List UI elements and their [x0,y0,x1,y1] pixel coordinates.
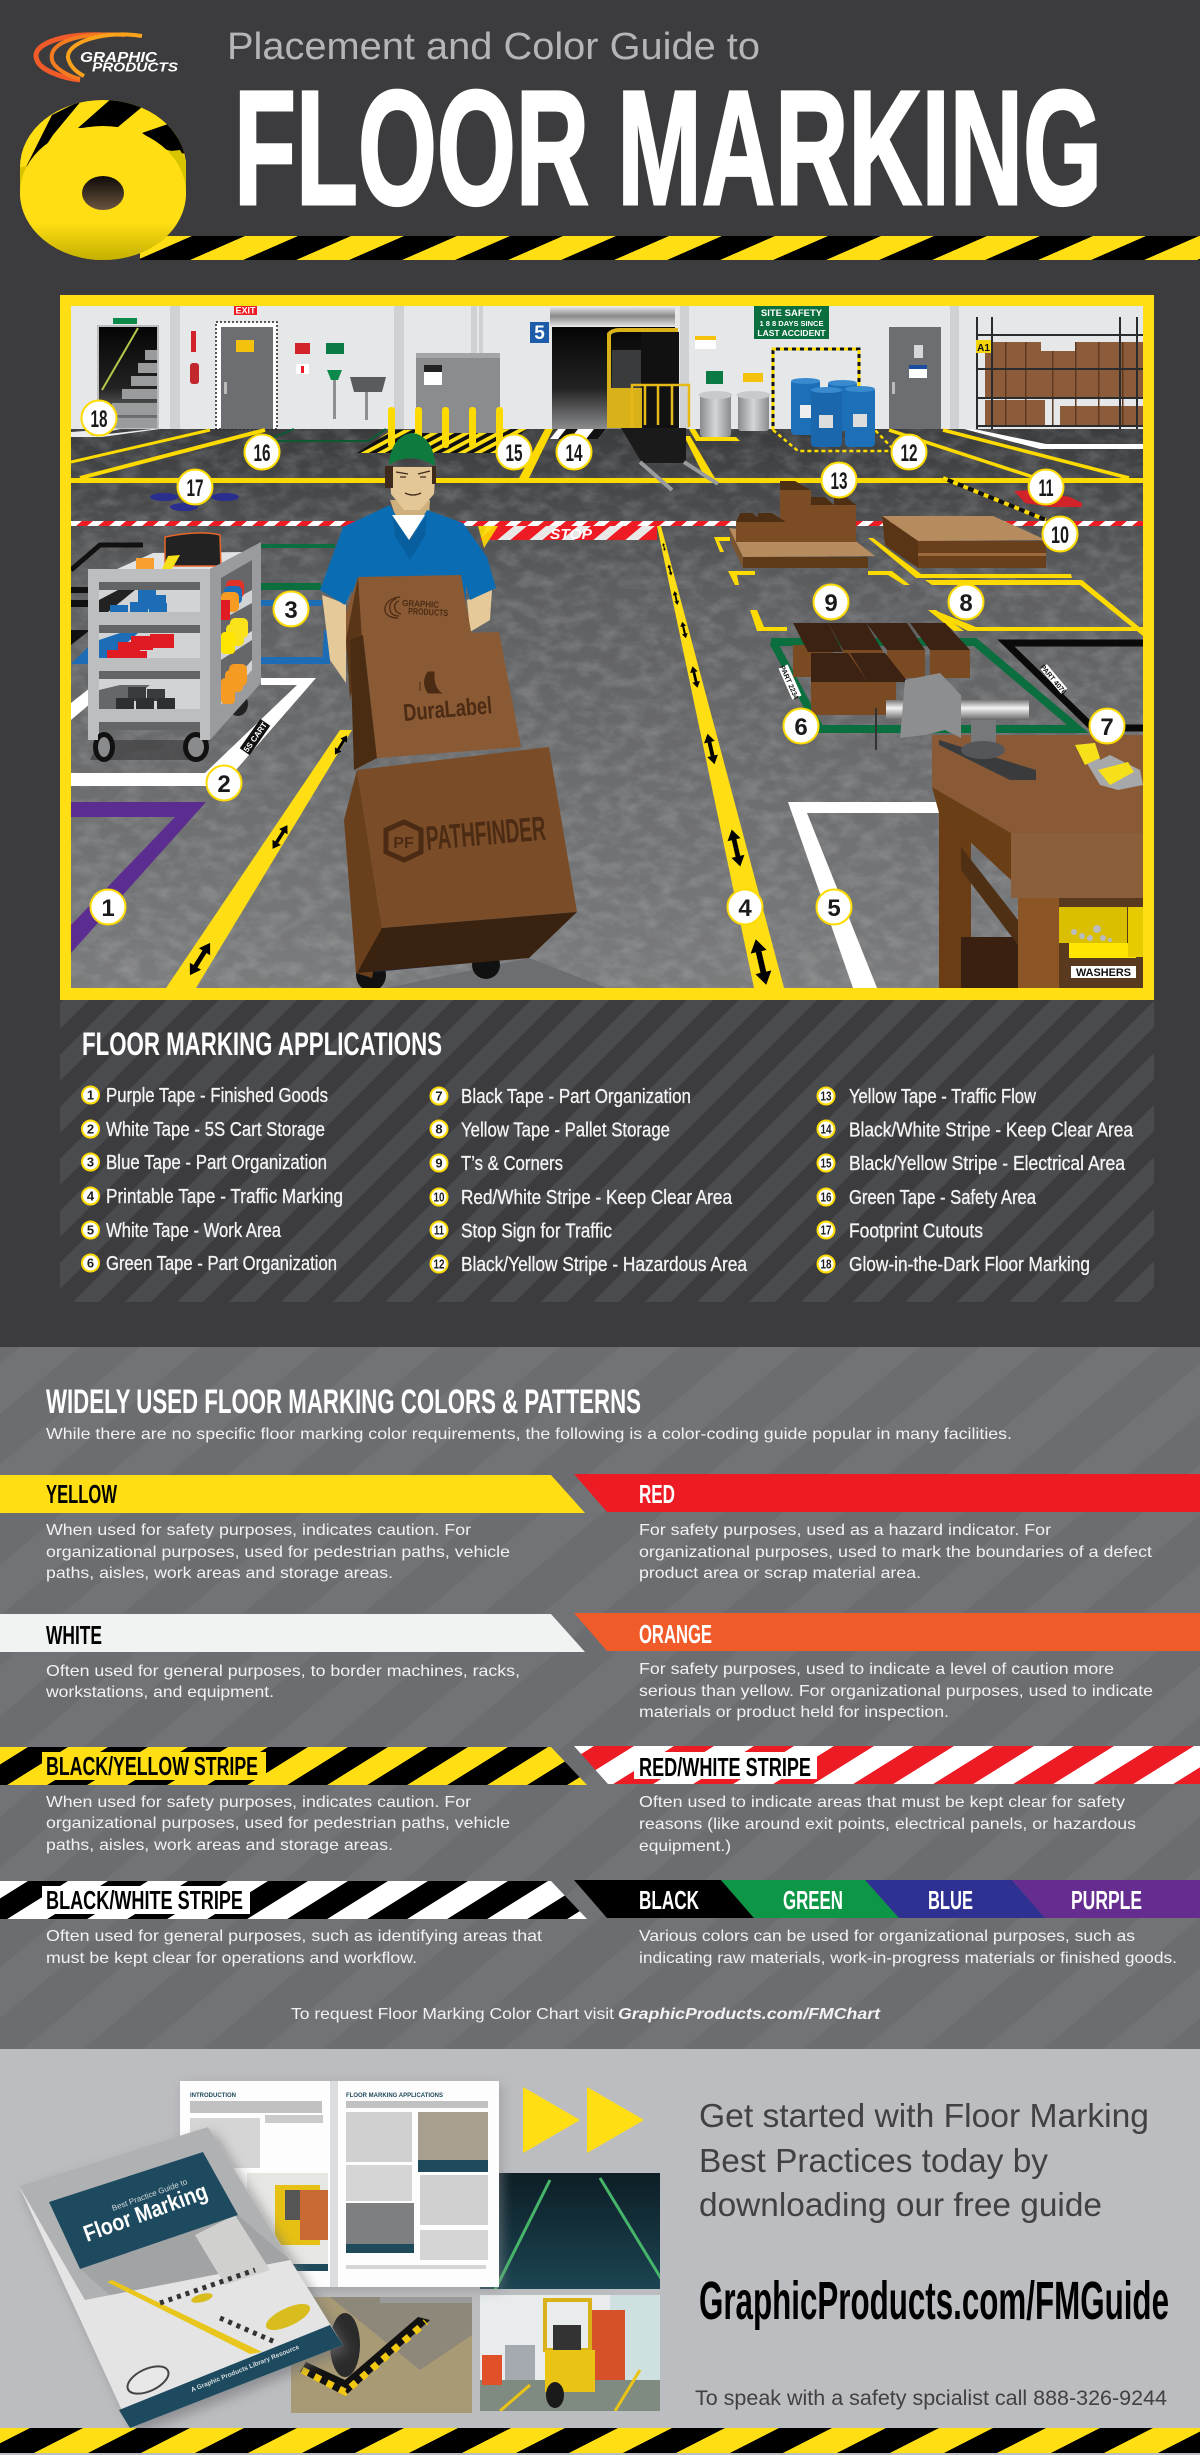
wall pillars and pipes [170,306,959,429]
red/white keep clear stripe [71,521,1143,526]
number badge 3: 3 [284,597,298,624]
color block: black/white stripe [0,1881,587,1967]
color block: black, green, blue, purple: BLUE [928,1885,973,1915]
number badge 2: 2 [217,771,231,798]
application list column 2: 9 [435,1156,443,1170]
color block: yellow [0,1475,585,1582]
color block: red/white stripe: reasons (like around exit points, electrical panels, or hazardous [639,1816,1136,1833]
electrical panel with bollards and hazard floor area [357,353,527,453]
number badge 13: 13 [830,468,848,495]
application list column 2: Black Tape - Part Organization [461,1086,691,1108]
number badge 11 [1028,470,1064,504]
color block: black/white stripe: must be kept clear for operations and workflow. [46,1950,417,1967]
wall [71,306,1143,430]
photo: glow-in-the-dark floor [480,2173,665,2290]
white tape 5S cart area [71,678,316,786]
call to action text [699,2097,1149,2223]
number badge 4 [728,890,762,924]
color block: black/yellow stripe: When used for safety purposes, indicates caution. For [46,1794,472,1811]
worker [320,433,496,683]
bench vise [875,673,1036,780]
color block: red/white stripe: RED/WHITE STRIPE [639,1752,811,1782]
dock door and location sign: 5 [534,323,545,344]
color block: black/white stripe: Often used for general purposes, such as identifying areas that [46,1928,543,1945]
application list column 3: Yellow Tape - Traffic Flow [849,1086,1036,1108]
forklift [609,330,718,490]
header: logo [36,34,178,80]
color block: red: organizational purposes, used to mark the boundaries of a defect [639,1544,1153,1561]
arrows: double chevron [523,2087,644,2153]
pallets with T's and corners [714,481,1143,636]
open guide booklet [180,2081,502,2290]
application list column 2: 10 [434,1190,444,1204]
number badge 1: 1 [101,895,115,922]
guide cover: Floor Marking [80,2178,211,2247]
purple tape [71,802,206,953]
application list column 1: 4 [87,1188,95,1204]
application list column 1: 5 [87,1222,94,1238]
applications heading: FLOOR MARKING APPLICATIONS [82,1026,442,1062]
site safety sign: SITE SAFETY [761,308,823,319]
number badge 6 [784,708,818,744]
application list column 3: 14 [820,1122,832,1136]
number badge 8 [948,584,984,620]
guide cover: Best Practice Guide to [111,2177,189,2213]
worker hat [389,433,435,466]
white tape 5S cart area: 5S CART [242,721,269,754]
color block: yellow: When used for safety purposes, indicates caution. For [46,1522,472,1539]
application list column 3: 17 [820,1222,832,1238]
application list column 1: White Tape - Work Area [106,1220,282,1242]
storage shelving with boxes: A1 [977,343,990,354]
worker arms [322,590,492,683]
PathFinder box: PF [393,835,414,852]
color block: black/yellow stripe: paths, aisles, work areas and storage areas. [46,1837,393,1854]
stop band: STOP [550,526,593,543]
black tape part area: PART 4076 [1039,664,1067,696]
number badge 5 [816,890,852,924]
scene frame [60,295,1154,1000]
color block: black/white stripe: BLACK/WHITE STRIPE [46,1885,243,1915]
application list column 3: Glow-in-the-Dark Floor Marking [849,1254,1090,1276]
application list column 2: 11 [434,1222,444,1238]
call to action text: Get started with Floor Marking [699,2097,1149,2134]
application list column 2: 8 [435,1122,443,1136]
header: subtitle: Placement and Color Guide to [227,26,760,68]
color block: white [0,1614,585,1701]
footprints and stop sign decal [150,490,1082,511]
open guide booklet: INTRODUCTION [190,2093,236,2099]
color block: white: workstations, and equipment. [45,1684,274,1701]
application list column 2: Stop Sign for Traffic [461,1220,612,1242]
cart front frame [88,569,210,740]
cart front rolls [107,590,175,709]
application list column 2: 12 [434,1256,444,1272]
application list column 2: Yellow Tape - Pallet Storage [461,1120,670,1142]
color chart request line: GraphicProducts.com/FMChart [618,2006,881,2023]
work gloves [1075,743,1143,790]
dock door and location sign [530,306,675,439]
color block: red/white stripe: equipment.) [639,1838,731,1855]
number badge 10 [1042,516,1078,552]
section intro: While there are no specific floor marking color requirements, the following is a color-coding guide popular in many facilities. [46,1426,1012,1443]
phone line: To speak with a safety spcialist call 888-326-9244 [695,2387,1167,2410]
worker face [390,467,436,510]
application list column 1: 3 [87,1154,94,1170]
green tape part area [771,642,1078,729]
site safety sign: LAST ACCIDENT [757,328,826,338]
hazard frame and blue barrels [773,349,895,451]
door with exit sign [216,306,277,429]
section background: colors and patterns [0,1347,1200,2049]
application list column 2: Red/White Stripe - Keep Clear Area [461,1187,733,1209]
worker neck [390,500,430,530]
number badge 14: 14 [566,440,583,467]
panel: floor marking applications [60,1000,1154,1302]
color block: black/yellow stripe: organizational purposes, used for pedestrian paths, vehicle [46,1815,510,1832]
page background: dark header section [0,0,1200,1347]
side rolls [221,580,248,704]
section heading: colors and patterns: WIDELY USED FLOOR MARKING COLORS & PATTERNS [46,1383,641,1421]
application list column 3: Footprint Cutouts [849,1220,983,1242]
section background: free guide [0,2049,1200,2455]
color block: red/white stripe [574,1746,1200,1855]
supply cart [88,533,261,762]
color block: red [574,1474,1200,1582]
top box logo second line: PRODUCTS [408,606,448,618]
workbench: WASHERS [1076,967,1131,979]
black tape part area [1006,643,1143,728]
DuraLabel box: DuraLabel [402,692,493,727]
top box: GRAPHIC [402,598,440,610]
color block: black, green, blue, purple: indicating raw materials, work-in-progress materials or finished goods. [639,1950,1177,1967]
application list column 3: Black/White Stripe - Keep Clear Area [849,1120,1134,1142]
color block: red: RED [639,1479,675,1509]
application list column 1: Purple Tape - Finished Goods [106,1085,328,1107]
number badge 2 [206,766,242,800]
number badge 12 [892,434,926,470]
application list column 2 [430,1086,748,1276]
number badge 16 [244,434,280,470]
photo: forklift in marked bay [480,2295,660,2411]
guide cover [19,2127,349,2434]
color block: orange: materials or product held for inspection. [639,1704,949,1721]
PathFinder box [344,747,577,978]
application list column 2: Black/Yellow Stripe - Hazardous Area [461,1254,748,1276]
color block: orange: For safety purposes, used to indicate a level of caution more [639,1661,1114,1678]
color block: orange: serious than yellow. For organizational purposes, used to indicate [639,1683,1153,1700]
green tape part area: PART 2234 [778,665,799,701]
color block: black, green, blue, purple: Various colors can be used for organizational purposes, such as [639,1928,1135,1945]
color block: white: Often used for general purposes, to border machines, racks, [46,1663,520,1680]
number badge 6: 6 [794,714,808,741]
color block: black, green, blue, purple: BLACK [639,1885,699,1915]
color chart request line: To request Floor Marking Color Chart visit [291,2006,615,2023]
application list column 3: 18 [820,1256,832,1272]
color block: yellow: organizational purposes, used for pedestrian paths, vehicle [46,1544,510,1561]
color block: red: For safety purposes, used as a hazard indicator. For [639,1522,1052,1539]
number badge 12: 12 [900,440,918,467]
number badge 1 [90,890,126,924]
number badge 17 [178,470,212,504]
panel: warehouse scene [60,295,1154,1000]
site safety sign [754,306,829,339]
application list column 1: 6 [87,1256,94,1270]
waste bins and signs [689,336,770,441]
upper floor lines [71,429,1143,520]
application list column 1: Green Tape - Part Organization [106,1253,337,1275]
stairwell with glow marking [97,318,159,429]
color block: black, green, blue, purple: PURPLE [1071,1885,1142,1915]
number badge 4: 4 [738,895,752,922]
top box [346,575,472,700]
color block: black/yellow stripe [0,1747,587,1854]
white tape work area [788,802,939,988]
stacked boxes on hand truck [344,575,607,991]
worker undershirt [392,515,425,540]
application list column 2: 7 [435,1088,443,1104]
DuraLabel box [350,632,521,770]
color block: yellow: paths, aisles, work areas and storage areas. [46,1565,393,1582]
footer hazard tape strip [0,2428,1200,2453]
open guide booklet: FLOOR MARKING APPLICATIONS [346,2093,443,2099]
workbench [932,735,1143,988]
application list column 3: 13 [820,1088,832,1104]
photo: checker floor tape [291,2297,472,2413]
number badge 9: 9 [824,590,838,617]
PathFinder box: PATHFINDER [424,810,547,858]
color block: red: product area or scrap material area. [639,1565,921,1582]
blue tape, green tape and black tape behind cart [71,545,335,664]
call to action text: Best Practices today by [699,2142,1049,2179]
number badge 15 [496,434,532,470]
guide cover: A Graphic Products Library Resource [190,2344,301,2394]
number badge 13 [822,462,856,498]
part boxes [793,623,970,715]
application list column 1: Blue Tape - Part Organization [106,1152,327,1174]
icon: tape roll [20,98,190,260]
color block: black, green, blue, purple: GREEN [783,1885,843,1915]
color block: black, green, blue, purple [574,1880,1200,1967]
number badge 17: 17 [186,475,204,502]
yellow printable tape with arrows left [166,730,352,988]
worker shirt [320,505,496,605]
number badge 9 [814,584,848,620]
color block: yellow: YELLOW [46,1479,117,1509]
door with notice [889,327,941,429]
header: logo: PRODUCTS [92,60,178,74]
number badge 18 [82,400,116,436]
number badge 16: 16 [254,440,270,467]
number badge 18: 18 [90,406,108,433]
color block: orange: ORANGE [639,1619,712,1649]
number badge 11: 11 [1038,475,1054,502]
label maker [136,533,221,569]
cart wheels [88,728,210,762]
number badge 3 [274,592,308,626]
application list column 1 [82,1085,343,1275]
number badge 7 [1090,708,1124,744]
color block: red/white stripe: Often used to indicate areas that must be kept clear for safety [639,1794,1125,1811]
application list column 2: T’s & Corners [461,1153,563,1175]
number badge 7: 7 [1100,714,1114,741]
number badge 14 [556,434,592,470]
application list column 3: Black/Yellow Stripe - Electrical Area [849,1153,1126,1175]
header: logo: GRAPHIC [80,50,158,66]
color block: black/yellow stripe: BLACK/YELLOW STRIPE [46,1751,258,1781]
number badge 15: 15 [506,440,522,467]
stop band [478,526,657,548]
site safety sign: 1 8 8 DAYS SINCE [760,319,823,328]
number badge 8: 8 [959,590,973,617]
floor [71,429,1143,989]
application list column 1: 2 [87,1122,94,1136]
application list column 3 [818,1086,1134,1276]
eyewash and sink [327,370,386,420]
number badge 5: 5 [827,895,841,922]
application list column 3: Green Tape - Safety Area [849,1187,1037,1209]
storage shelving with boxes [976,317,1143,429]
application list column 3: 15 [820,1156,832,1170]
color block: white: WHITE [46,1620,102,1650]
color block: orange [574,1613,1200,1721]
application list column 1: White Tape - 5S Cart Storage [106,1119,325,1141]
number badge 10: 10 [1051,522,1069,549]
fire extinguisher and safety signs [190,331,344,384]
application list column 1: Printable Tape - Traffic Marking [106,1186,343,1208]
door with exit sign: EXIT [235,306,256,316]
application list column 1: 1 [87,1088,94,1102]
application list column 3: 16 [820,1190,832,1204]
color chart request line [291,2006,881,2023]
header: hazard tape strip [140,236,1200,260]
call to action text: downloading our free guide [699,2186,1102,2223]
yellow printable tape with arrows right [657,526,784,988]
